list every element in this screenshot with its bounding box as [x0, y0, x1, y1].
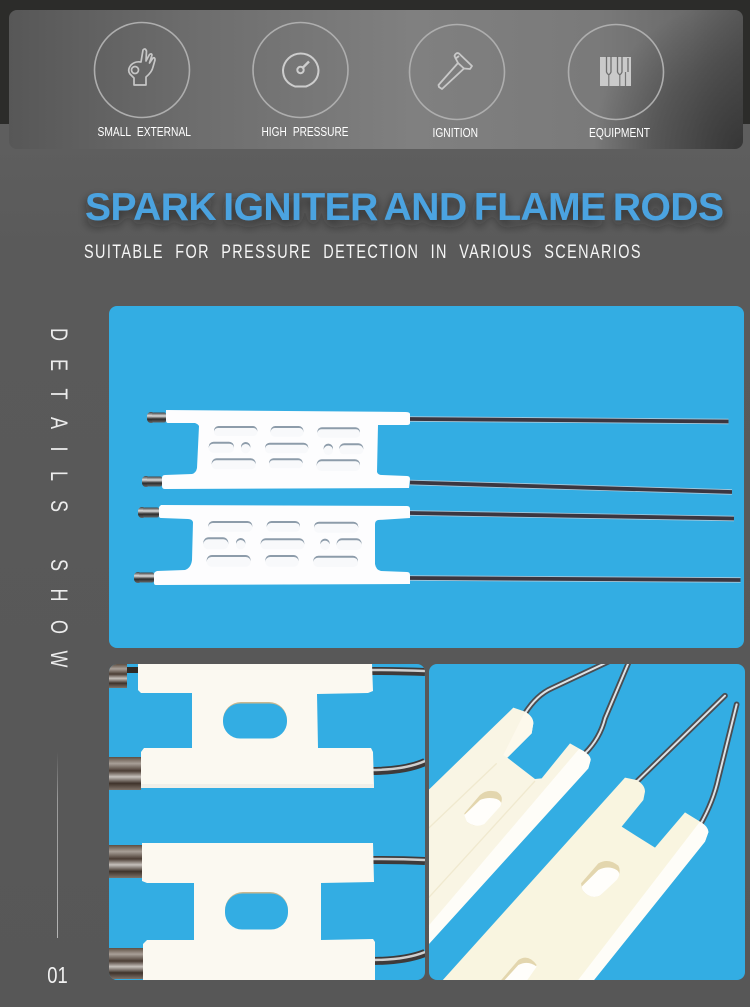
ceramic left rod: [425, 708, 591, 948]
panel: close-up angled view: [425, 662, 745, 985]
panel: main product photo: [109, 306, 744, 648]
icon: igniter: [438, 53, 472, 89]
wires: [525, 662, 737, 825]
label: SMALL EXTERNAL: [98, 125, 191, 139]
icon: gauge: [283, 54, 318, 86]
metal sleeves: [109, 664, 143, 979]
dark top band: [0, 0, 750, 124]
section number: 01: [47, 963, 68, 989]
vertical label: show: SHOW: [45, 559, 71, 668]
label: EQUIPMENT: [589, 126, 650, 140]
wires right: [370, 670, 425, 961]
vertical divider line: [57, 752, 58, 938]
igniter lower: [154, 505, 410, 585]
ceramic right rod: [438, 778, 708, 985]
ceramic upper: [138, 664, 374, 788]
feature: ignition: [410, 24, 504, 140]
label: IGNITION: [432, 126, 478, 140]
panel: close-up front view: [109, 664, 425, 980]
icon: keyboard: [600, 56, 631, 86]
panel: feature icons: [9, 10, 743, 149]
feature: equipment: [568, 24, 664, 140]
ceramic lower: [142, 843, 375, 980]
icon: ok hand: [129, 49, 155, 85]
label: HIGH PRESSURE: [262, 125, 348, 139]
title: SPARK IGNITER AND FLAME RODS: [85, 186, 724, 229]
wires: [410, 419, 740, 580]
igniter upper: [162, 410, 410, 489]
feature: high pressure: [253, 22, 348, 139]
vertical label: details: DETAILS: [45, 328, 71, 512]
metal tips: [134, 412, 166, 583]
subtitle: SUITABLE FOR PRESSURE DETECTION IN VARIOUS SCENARIOS: [84, 240, 640, 263]
feature: small external: [94, 22, 191, 139]
